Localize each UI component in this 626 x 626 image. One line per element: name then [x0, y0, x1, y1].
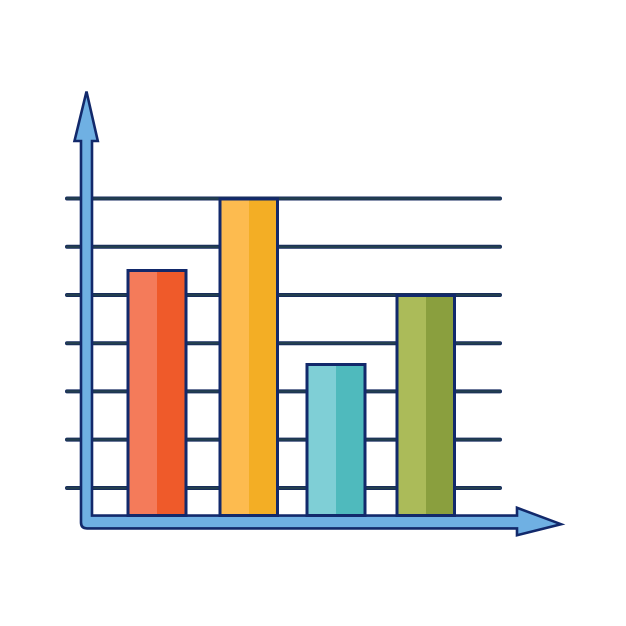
bar: green — [397, 296, 454, 516]
y axis arrow and x axis arrow — [74, 92, 561, 535]
bar: yellow — [220, 199, 278, 516]
grid lines — [67, 198, 500, 488]
bar: teal — [307, 364, 365, 516]
axes — [74, 92, 561, 535]
bar: red — [128, 270, 186, 516]
